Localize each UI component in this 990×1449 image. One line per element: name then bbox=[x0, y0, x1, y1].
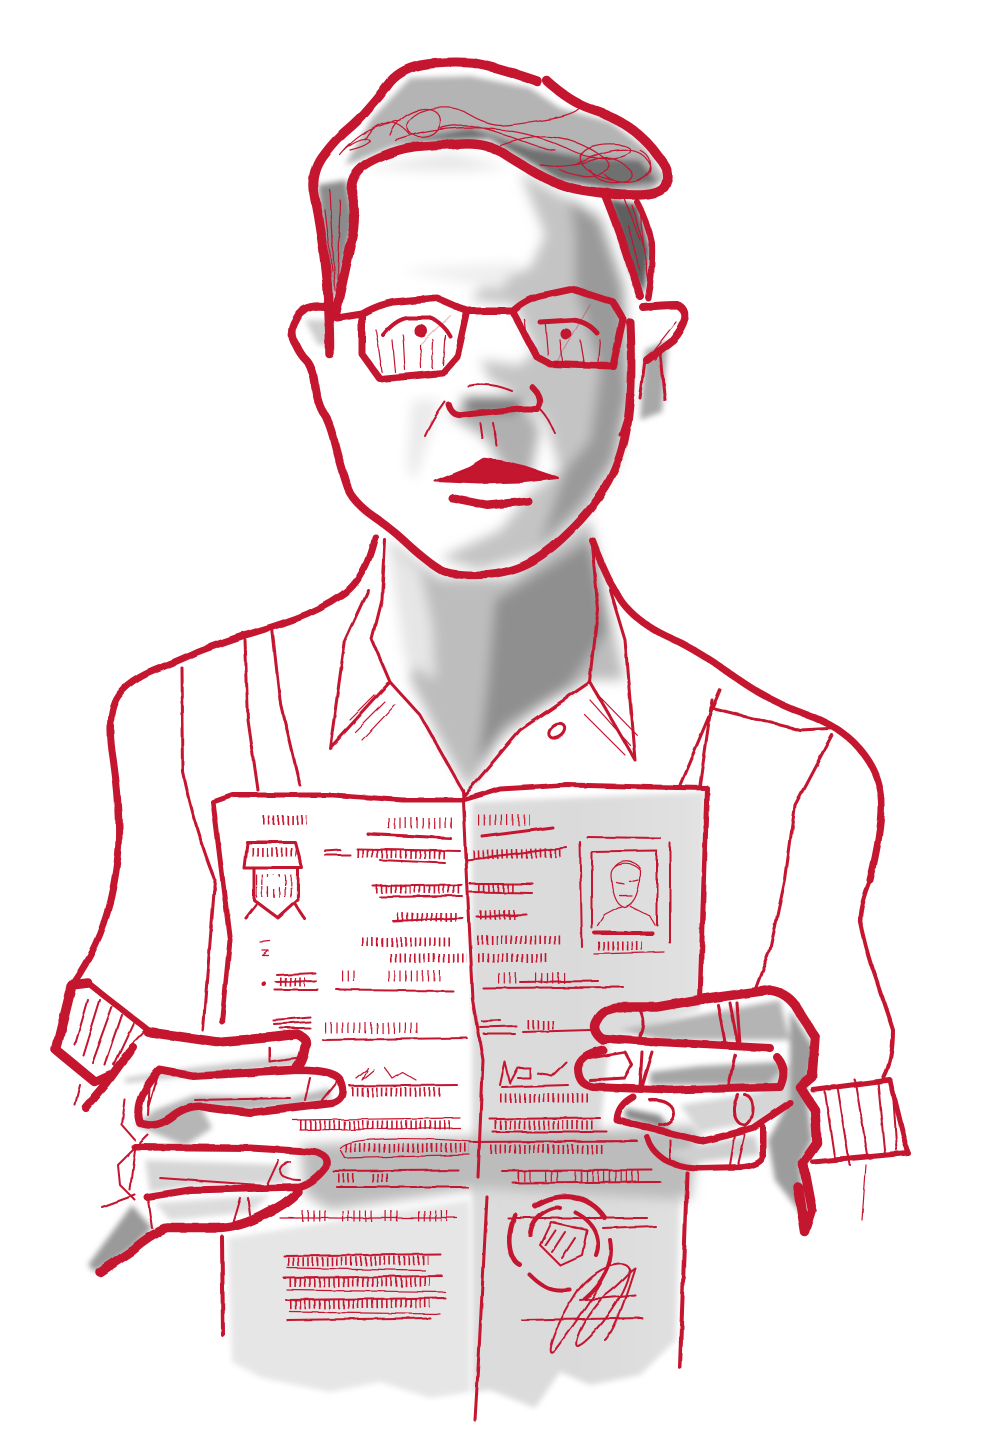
right hand bbox=[578, 990, 908, 1232]
head outline bbox=[292, 62, 685, 575]
shirt seams bbox=[182, 668, 215, 1030]
text rows: left page bbox=[260, 820, 477, 1320]
text rows: right page bbox=[467, 820, 660, 1183]
back of hand bbox=[595, 990, 817, 1232]
lips bbox=[435, 459, 558, 483]
collar right bbox=[465, 590, 635, 795]
glasses bbox=[337, 289, 623, 366]
hair outline bbox=[314, 62, 537, 354]
eyes bbox=[383, 318, 450, 336]
right cuff bbox=[813, 1080, 908, 1162]
ring finger bbox=[617, 1097, 790, 1141]
collar left bbox=[330, 590, 465, 795]
second finger bbox=[138, 1070, 343, 1125]
emblem bbox=[244, 842, 304, 918]
shirt button bbox=[546, 721, 568, 741]
right shoulder and sleeve bbox=[592, 540, 882, 880]
left ear and jaw bbox=[292, 307, 631, 575]
left cuff bbox=[56, 983, 110, 1082]
stamp bbox=[508, 1197, 655, 1298]
third finger bbox=[135, 1147, 327, 1197]
torso outline bbox=[72, 537, 893, 1077]
middle finger bbox=[578, 1050, 783, 1090]
passport bbox=[213, 785, 707, 1420]
signature bbox=[522, 1264, 642, 1352]
left shoulder and sleeve bbox=[72, 537, 375, 985]
little finger bbox=[647, 1127, 763, 1168]
left hand bbox=[56, 983, 343, 1272]
thumb bbox=[100, 1192, 298, 1272]
grey wash: neck bbox=[388, 520, 625, 790]
grey wash: hair shading bbox=[318, 76, 665, 305]
grey wash: ears bbox=[305, 320, 668, 420]
lens reflections bbox=[376, 320, 600, 372]
index finger bbox=[600, 1038, 770, 1048]
grey wash: left hand bbox=[88, 1055, 330, 1272]
top finger bbox=[148, 1032, 306, 1067]
passport outline bbox=[213, 785, 707, 1022]
grey wash: document pages bbox=[228, 792, 705, 1408]
grey wash: right hand bbox=[620, 1000, 815, 1220]
grey wash: face shadow bbox=[360, 152, 630, 570]
right ear bbox=[643, 305, 685, 360]
photo bbox=[580, 837, 670, 954]
hair scribble bbox=[325, 100, 650, 290]
nose bbox=[468, 384, 512, 391]
